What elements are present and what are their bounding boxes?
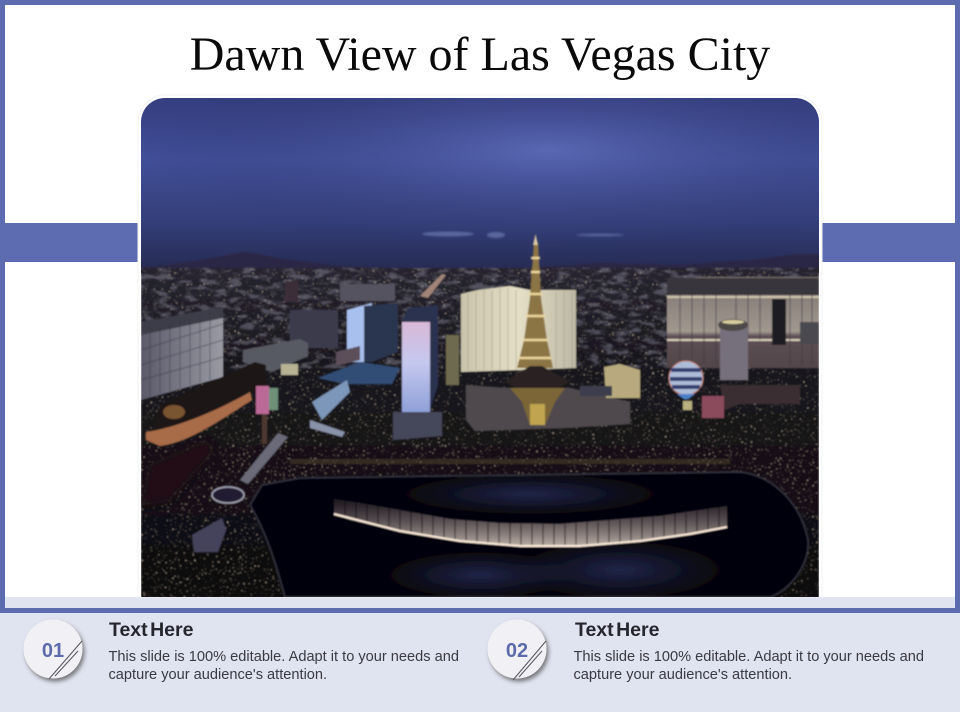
description 01: capture your audience's attention. (108, 667, 327, 683)
Paris casino complex (466, 385, 630, 431)
waterfront promenade (290, 459, 730, 464)
badge 02: 02 (506, 640, 528, 662)
fountains (334, 499, 727, 546)
photo border (138, 95, 822, 597)
city haze (141, 268, 819, 368)
badge 02 (486, 620, 552, 684)
footer strip (0, 597, 960, 712)
Eiffel tower replica (505, 234, 570, 425)
badge 01: 01 (42, 640, 64, 662)
street sign (256, 386, 269, 414)
item 01 (22, 619, 459, 684)
Blue towers (310, 303, 442, 440)
heading 01: Text Here (109, 619, 193, 641)
title: Dawn View of Las Vegas City (190, 28, 770, 81)
ground (141, 268, 819, 598)
low casino building (243, 339, 308, 372)
right side band (822, 223, 960, 262)
heading 02: Text Here (575, 619, 659, 641)
description 02: capture your audience's attention. (574, 667, 792, 683)
description 02: This slide is 100% editable. Adapt it to your needs and (574, 649, 924, 665)
sky (141, 98, 819, 273)
low right district (720, 385, 800, 410)
lake reflection (385, 473, 725, 600)
description 01 (108, 649, 459, 683)
Paris hotel (461, 286, 576, 372)
left side band (0, 223, 138, 262)
description 02 (574, 649, 924, 683)
badge 01 (22, 620, 88, 684)
item 02 (486, 619, 924, 684)
distant mountains (148, 252, 819, 268)
description 01: This slide is 100% editable. Adapt it to your needs and (108, 649, 459, 665)
walkway (240, 433, 288, 484)
Flamingo hotel (141, 307, 223, 400)
hot air balloon sign (669, 361, 703, 410)
Bellagio lake (250, 472, 808, 597)
clouds (422, 232, 624, 238)
pedestrian dome (212, 487, 244, 503)
casino sign (146, 392, 252, 446)
photo: Las Vegas at dawn (138, 94, 822, 598)
city light speckle (141, 268, 819, 598)
right hotel (667, 277, 819, 380)
